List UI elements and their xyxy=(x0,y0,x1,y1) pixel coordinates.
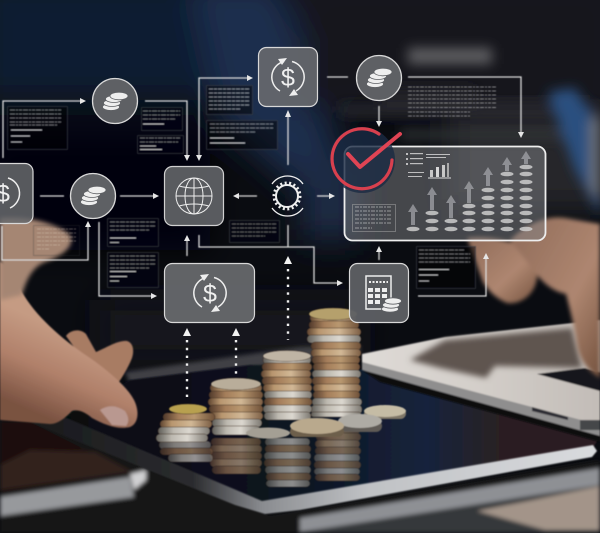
hand: fingernail xyxy=(100,406,128,426)
node: coin circle top right xyxy=(356,56,402,100)
arrowheads xyxy=(80,75,524,299)
text block G xyxy=(108,218,158,246)
dashboard bar chart xyxy=(428,163,451,178)
text block K xyxy=(416,246,476,288)
node: coin circle middle xyxy=(70,174,116,218)
text block H xyxy=(108,252,158,288)
node: globe box xyxy=(164,166,224,226)
hand: palm and index finger xyxy=(0,262,137,428)
node: dollar box bottom: $ xyxy=(203,280,217,308)
table surface xyxy=(0,420,600,533)
laptop xyxy=(362,320,600,442)
text block C xyxy=(138,136,184,154)
text block I xyxy=(230,220,280,242)
text blocks xyxy=(8,86,496,288)
right hand xyxy=(467,217,600,378)
background device: keyboard edge behind stacks xyxy=(125,345,360,386)
dotted arrows xyxy=(183,256,292,398)
text block F xyxy=(34,226,80,256)
text block B xyxy=(142,108,182,130)
red check mark xyxy=(329,127,400,193)
text block J xyxy=(408,87,496,116)
coin stack 1 xyxy=(156,404,215,462)
left hand xyxy=(0,217,137,428)
coin stacks xyxy=(156,308,406,487)
dashboard legend xyxy=(406,153,450,177)
coin columns xyxy=(406,165,532,231)
coin stack 3 xyxy=(261,350,312,487)
node: dollar box top xyxy=(258,48,318,106)
dashboard panel xyxy=(344,146,546,240)
node: gear cycle icon xyxy=(272,176,303,216)
dashboard text block xyxy=(352,204,396,232)
text block E xyxy=(206,120,278,150)
node: dollar box bottom xyxy=(164,264,254,322)
node: calculator box xyxy=(350,264,408,322)
tablet xyxy=(20,365,600,514)
node: dollar box left xyxy=(0,164,33,224)
coin stack 2 xyxy=(208,378,263,474)
hand: thumb xyxy=(0,217,71,300)
loose coins xyxy=(246,405,406,438)
text block D xyxy=(206,86,252,114)
node: dollar box top: $ xyxy=(281,64,295,92)
connector arrows and lines xyxy=(2,77,521,296)
node: coin circle top left xyxy=(92,78,138,124)
coin stack 4 xyxy=(307,308,362,481)
growth arrows xyxy=(408,151,531,225)
text block A xyxy=(8,106,68,150)
hand: ring and middle fingers xyxy=(66,330,133,386)
